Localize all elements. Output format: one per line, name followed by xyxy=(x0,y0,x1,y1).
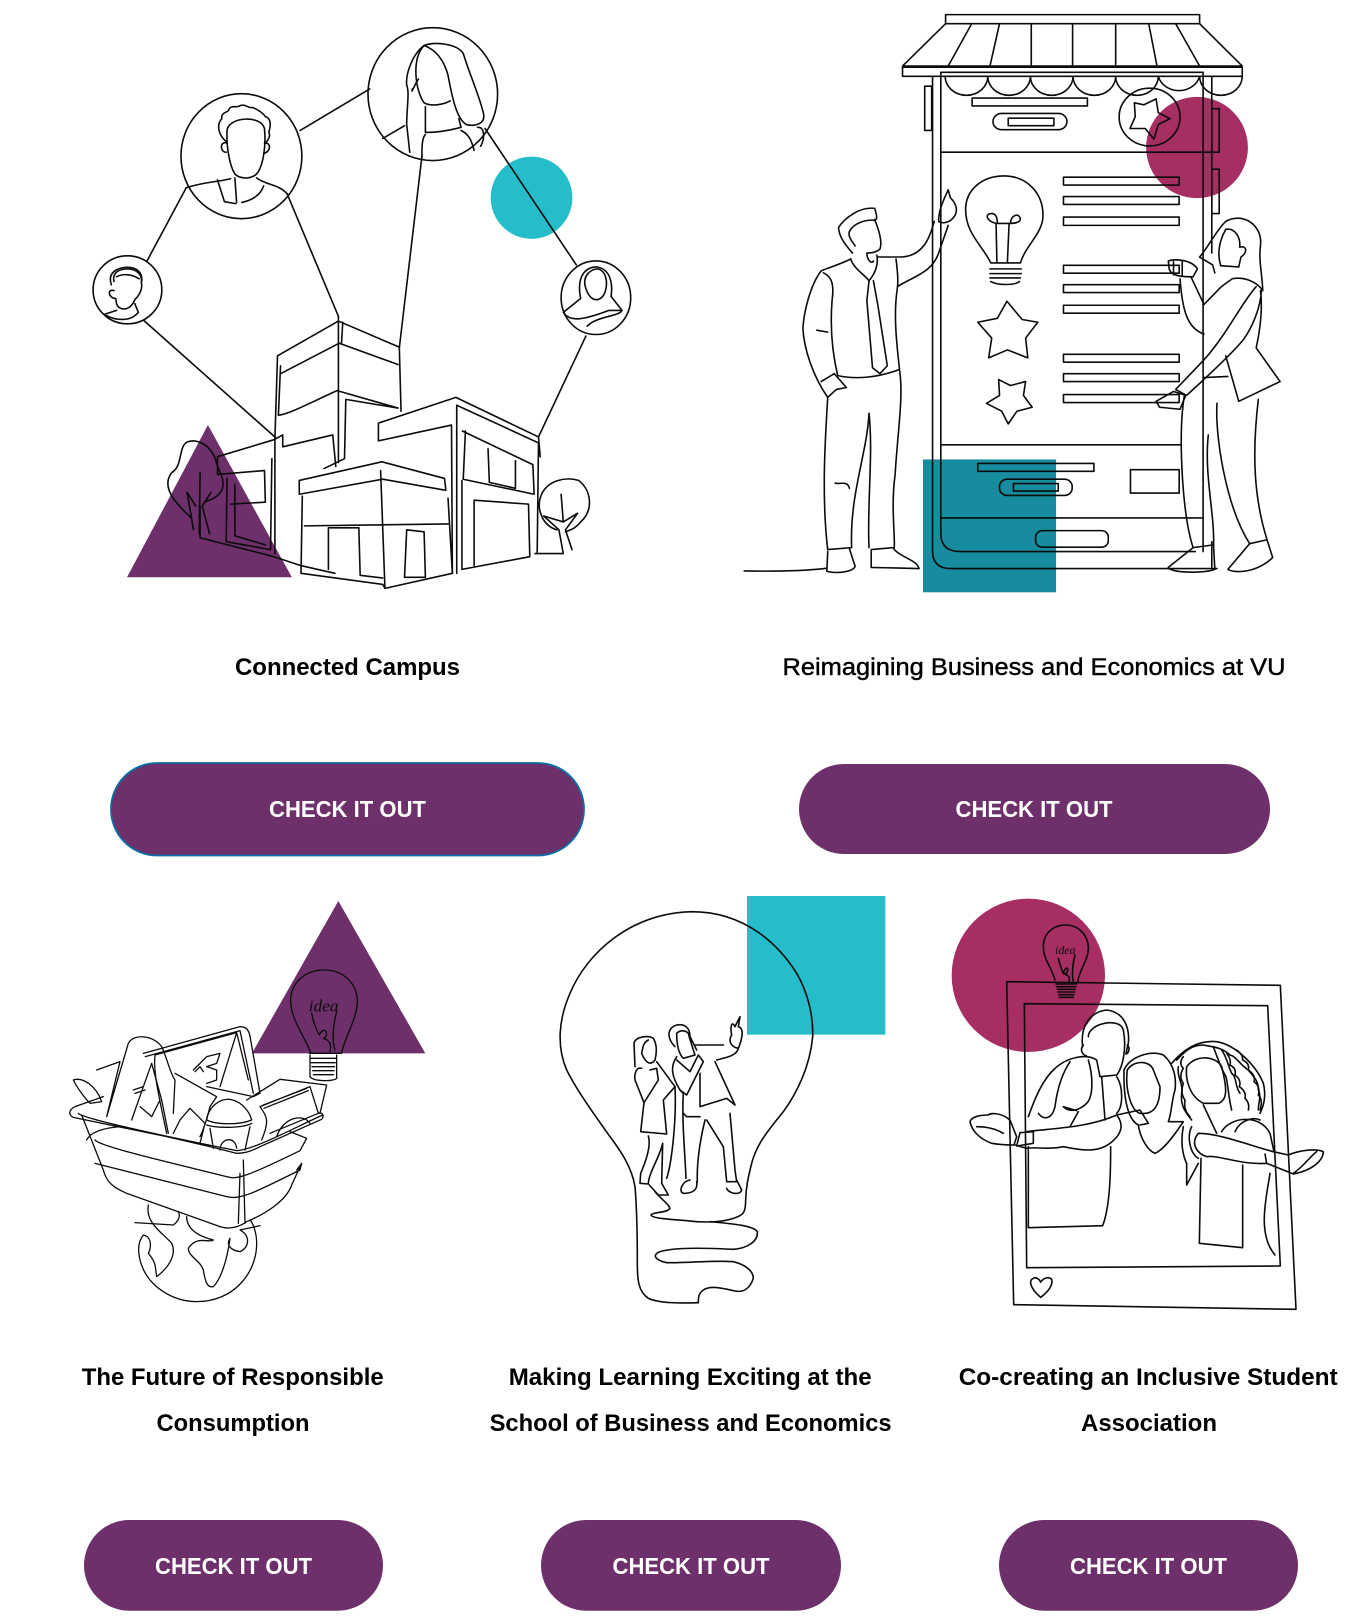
illustration: students in a photo frame xyxy=(952,899,1323,1309)
shape: teal circle xyxy=(491,157,572,239)
heading: Making Learning Exciting at the School of Business and Economics: School of Business and Economics xyxy=(490,1410,892,1437)
panel: The Future of Responsible Consumption xyxy=(70,901,425,1611)
text: idea inside bulb: idea xyxy=(309,997,339,1016)
button: check it out xyxy=(541,1520,841,1611)
illustration: campus building linked to people xyxy=(93,28,631,588)
shape: magenta circle xyxy=(952,899,1105,1052)
text: idea inside bulb: idea xyxy=(1055,943,1076,957)
line drawing: phone shop xyxy=(744,15,1280,572)
button: check it out: CHECK IT OUT xyxy=(612,1553,770,1579)
illustration: basket on globe with idea bulb xyxy=(70,901,425,1302)
illustration: two people inside a light bulb xyxy=(560,896,885,1303)
button: check it out: CHECK IT OUT xyxy=(956,796,1113,822)
shape: teal square xyxy=(747,896,885,1035)
button: check it out xyxy=(84,1520,383,1611)
line drawing: bulb and figures xyxy=(560,912,813,1303)
line drawing: photo frame and students xyxy=(970,925,1323,1309)
button: check it out: CHECK IT OUT xyxy=(155,1553,313,1579)
panel: Connected Campus xyxy=(93,28,631,856)
heading: Making Learning Exciting at the School of Business and Economics xyxy=(490,1364,892,1437)
heading: The Future of Responsible Consumption xyxy=(82,1364,384,1437)
button: check it out xyxy=(111,763,584,856)
shape: purple triangle xyxy=(252,901,425,1053)
heading: Co-creating an Inclusive Student Association: Co-creating an Inclusive Student xyxy=(959,1364,1338,1391)
heading: Co-creating an Inclusive Student Association: Association xyxy=(1081,1410,1217,1437)
heading: The Future of Responsible Consumption: Consumption xyxy=(156,1410,310,1437)
heading: Co-creating an Inclusive Student Association xyxy=(959,1364,1338,1437)
panel: Making Learning Exciting at the School of Business and Economics xyxy=(490,896,892,1611)
illustration: phone storefront with two people xyxy=(744,15,1280,592)
button: check it out xyxy=(799,764,1270,854)
shape: purple triangle xyxy=(127,425,292,577)
button: check it out: CHECK IT OUT xyxy=(1070,1553,1228,1579)
panel: Reimagining Business and Economics at VU xyxy=(744,15,1286,854)
heading: The Future of Responsible Consumption: The Future of Responsible xyxy=(82,1364,384,1391)
heading: Connected Campus: Connected Campus xyxy=(235,654,460,681)
button: check it out: CHECK IT OUT xyxy=(269,796,427,822)
line drawing: network and building xyxy=(93,28,631,588)
heading: Making Learning Exciting at the School of Business and Economics: Making Learning Exciting at the xyxy=(509,1364,872,1391)
line drawing: basket, globe, bulb xyxy=(70,970,357,1302)
panel: Co-creating an Inclusive Student Association xyxy=(952,899,1338,1611)
button: check it out xyxy=(999,1520,1298,1611)
shape: magenta circle xyxy=(1146,97,1248,198)
heading: Reimagining Business and Economics at VU: Reimagining Business and Economics at VU xyxy=(782,654,1286,681)
shape: dark teal square xyxy=(923,459,1056,592)
